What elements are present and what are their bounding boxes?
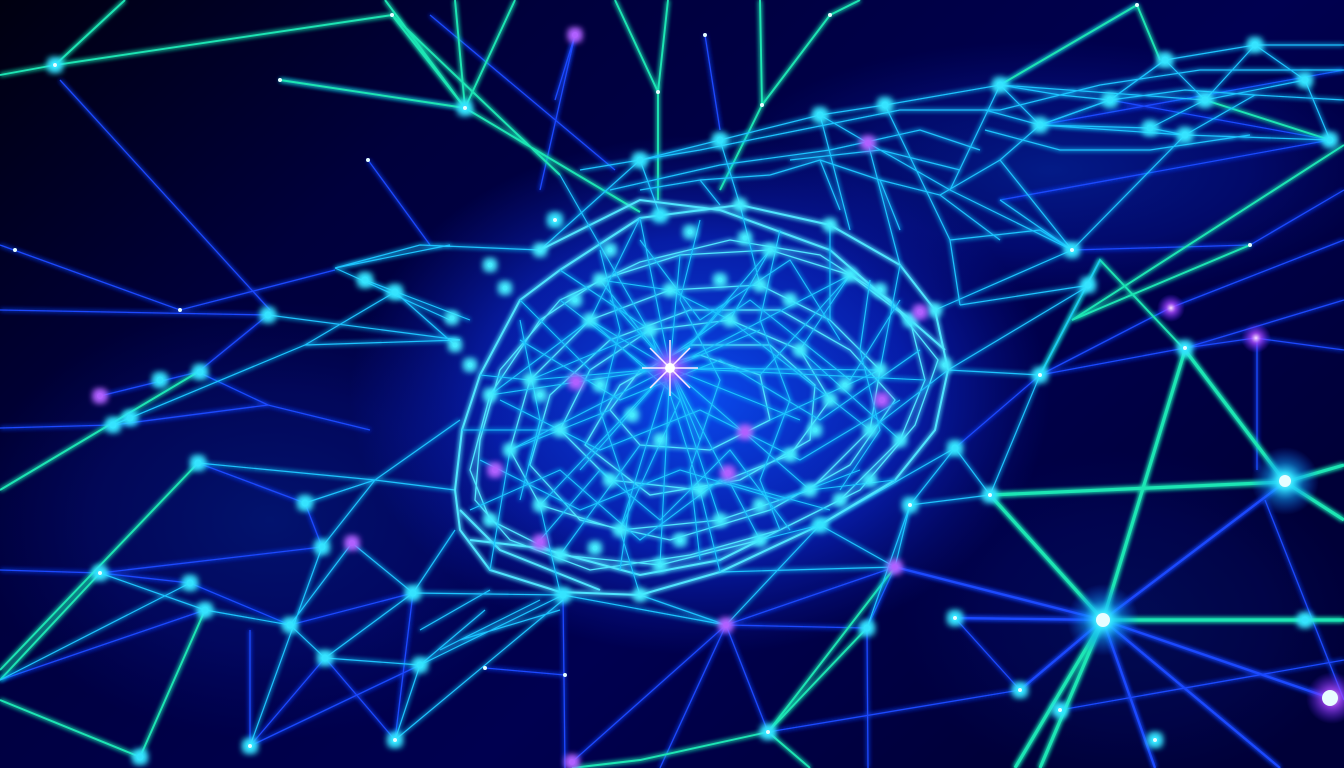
large purple halos at right — [1157, 294, 1344, 724]
hub and corner node centres — [1096, 475, 1338, 706]
swirl: concentric mesh rings — [455, 200, 948, 595]
purple nodes — [100, 35, 920, 762]
central starburst — [642, 340, 698, 396]
cyan nodes: swirl — [452, 205, 945, 595]
hub nodes: large glowing junctions — [1067, 447, 1319, 656]
swirl: radial spokes from the centre — [462, 175, 948, 595]
